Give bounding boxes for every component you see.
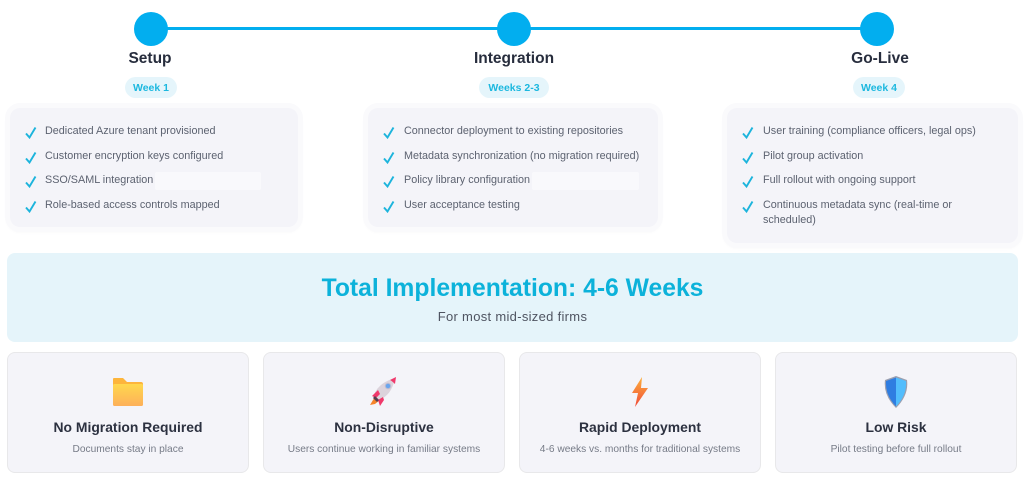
banner heading: Total Implementation: 4-6 Weeks xyxy=(322,275,703,302)
heading: go-live: Go-Live xyxy=(851,50,909,67)
banner subtext: For most mid-sized firms xyxy=(438,309,587,324)
badge: week 1: Week 1 xyxy=(133,82,169,94)
icon: folder xyxy=(113,378,143,406)
heading: integration: Integration xyxy=(474,50,554,67)
panel: go-live tasks: User training (compliance officers, legal ops) xyxy=(763,125,976,137)
title: Non-Disruptive xyxy=(334,419,434,435)
panel: go-live tasks: Pilot group activation xyxy=(763,150,863,162)
icon: shield xyxy=(884,376,908,408)
title: No Migration Required xyxy=(54,419,202,435)
step marker: go-live xyxy=(860,12,894,46)
description: Users continue working in familiar systems xyxy=(288,444,480,455)
panel: setup tasks: Dedicated Azure tenant provisioned xyxy=(45,125,215,137)
connector line xyxy=(150,27,878,30)
panel: integration tasks: Connector deployment to existing repositories xyxy=(404,125,623,137)
title: Low Risk xyxy=(866,419,926,435)
badge: weeks 2-3: Weeks 2-3 xyxy=(488,82,540,94)
benefit card: rapid deployment xyxy=(519,352,761,473)
icon: lightning bolt xyxy=(632,377,648,407)
benefit card: no migration xyxy=(7,352,249,473)
panel: setup tasks: Customer encryption keys configured xyxy=(45,150,223,162)
icon: rocket xyxy=(370,377,396,406)
badge: week 1 xyxy=(125,77,177,98)
badge: weeks 2-3 xyxy=(479,77,549,98)
panel: integration tasks: Metadata synchronization (no migration required) xyxy=(404,150,639,162)
description: Pilot testing before full rollout xyxy=(831,444,961,455)
step marker: integration xyxy=(497,12,531,46)
description: Documents stay in place xyxy=(72,444,183,455)
panel: go-live tasks: Continuous metadata sync (real-time or xyxy=(763,199,952,211)
panel: integration tasks: User acceptance testing xyxy=(404,199,520,211)
step marker: setup xyxy=(134,12,168,46)
benefit card: low risk xyxy=(775,352,1017,473)
heading: setup: Setup xyxy=(128,50,172,67)
panel: go-live tasks xyxy=(727,108,1018,243)
badge: week 4: Week 4 xyxy=(861,82,897,94)
panel: setup tasks: Role-based access controls mapped xyxy=(45,199,220,211)
description: 4-6 weeks vs. months for traditional systems xyxy=(540,444,740,455)
timeline xyxy=(125,12,909,98)
panel: go-live tasks: scheduled) xyxy=(763,214,816,226)
panel: integration tasks xyxy=(368,108,658,227)
title: Rapid Deployment xyxy=(579,419,701,435)
panel: integration tasks: Policy library configuration xyxy=(404,174,530,186)
panel: setup tasks: SSO/SAML integration xyxy=(45,174,153,186)
benefit card: non-disruptive xyxy=(263,352,505,473)
panel: setup tasks xyxy=(10,108,298,227)
panel: go-live tasks: Full rollout with ongoing support xyxy=(763,174,915,186)
badge: week 4 xyxy=(853,77,905,98)
summary banner xyxy=(7,253,1018,342)
